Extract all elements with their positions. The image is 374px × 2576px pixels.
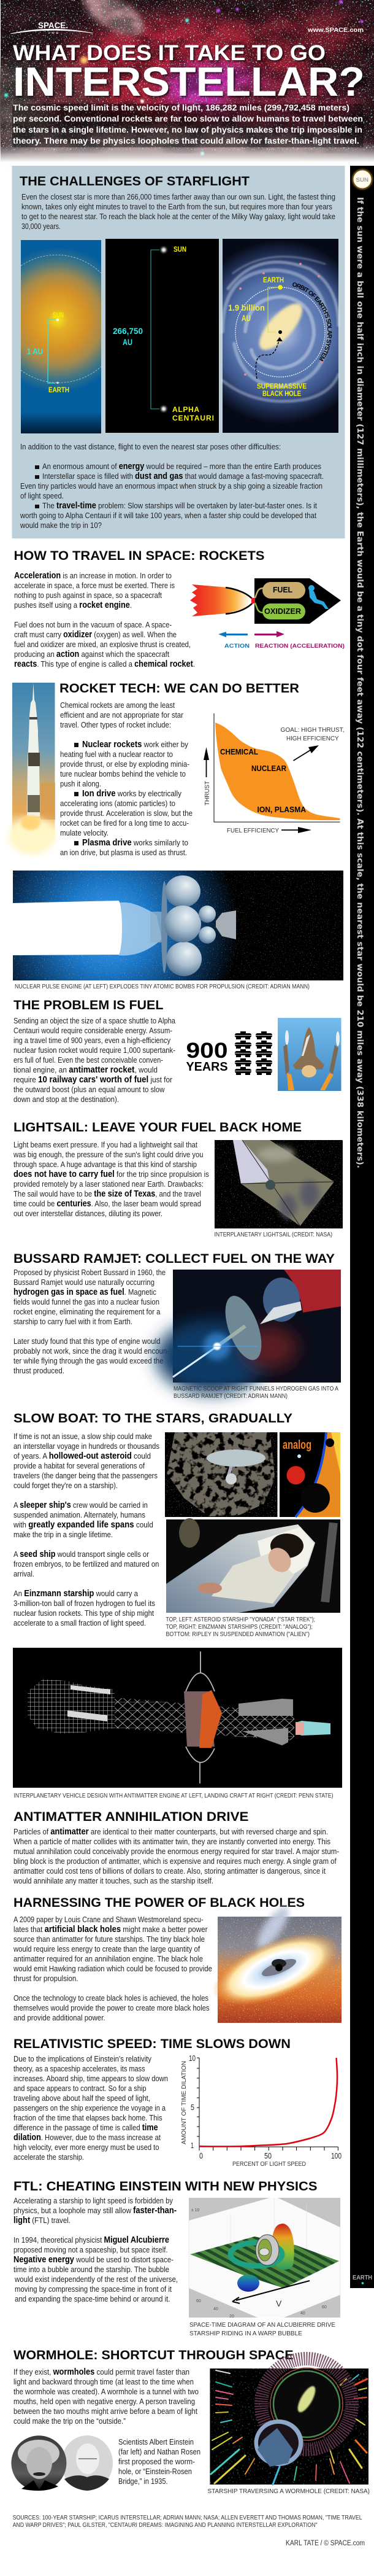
chart: thrust vs fuel efficiency: CHEMICAL <box>220 747 258 756</box>
text: slow boat: provide a habitat for several generations of <box>13 1461 145 1470</box>
website url: www.SPACE.com <box>307 26 364 34</box>
text: other difficulties: worth going to Alpha Centauri if it will take 100 years, when a faster ship could be developed that <box>20 511 316 520</box>
diagram: alcubierre warp bubble: x 10 <box>191 2208 199 2213</box>
text: slow boat: nuclear fusion rockets. This type of ship might <box>13 1608 154 1618</box>
text: acceleration: accelerate in space, a force must be exerted. There is <box>14 581 175 590</box>
diagram: sun to alpha centauri 266,750 AU: ALPHA <box>172 405 199 414</box>
diagram: milky way galaxy <box>221 239 340 433</box>
text: other difficulties: In addition to the vast distance, flight to even the nearest star poses other difficulties: <box>20 442 281 451</box>
text: other difficulties: of light speed. <box>20 491 64 500</box>
text: rocket types: heating fuel with a nuclear reactor to <box>60 750 173 759</box>
chart: time dilation: 10 <box>189 2054 196 2063</box>
text: slow boat: A seed ship would transport single cells or <box>13 1550 150 1559</box>
text: relativistic speed: fraction of the time that elapses back home. This <box>13 2113 162 2122</box>
label: earth: EARTH <box>353 2275 372 2281</box>
diagram: milky way galaxy: AU <box>242 313 251 323</box>
text: bussard ramjet: hydrogen gas in space as fuel. Magnetic <box>13 1287 156 1297</box>
chart: thrust vs fuel efficiency: THRUST <box>204 781 211 805</box>
caption: slow boat images: TOP, LEFT: ASTEROID STARSHIP "YONADA" ("STAR TREK"); <box>166 1616 315 1623</box>
text: lightsail: was big enough, the pressure of the sun's light could drive you <box>13 1150 203 1159</box>
text: antimatter: Particles of antimatter are identical to their matter counterparts, but with reversed charge and spin. <box>13 1827 328 1837</box>
photo: interplanetary antimatter vehicle <box>13 1648 342 1788</box>
text: einstein and rosen: Scientists Albert Einstein <box>118 2437 194 2446</box>
text: slow boat: make the trip in a single lifetime. <box>13 1530 113 1539</box>
text: relativistic speed: and space appears to contract. So for a ship <box>13 2084 146 2093</box>
text: ftl: Accelerating a starship to light speed is forbidden by <box>13 2196 173 2205</box>
text: relativistic speed: Due to the implications of Einstein's relativity <box>13 2054 151 2063</box>
diagram: sun to alpha centauri 266,750 AU: SUN <box>174 245 186 254</box>
text: problem is fuel: tional engine, an antimatter rocket, would <box>13 1065 158 1075</box>
text: other difficulties: Interstellar space is filled with dust and gas that would damage a fast-moving spacecraft. <box>42 471 324 481</box>
text: slow boat: An Einzmann starship would carry a <box>13 1589 139 1599</box>
sidebar: scale model of the sun to earth <box>350 166 374 2288</box>
text: problem is fuel: ing a travel time of 900 years, even a high-efficiency <box>13 1036 170 1045</box>
text: rocket types: accelerating ions (atomic particles) to <box>60 799 175 808</box>
chart: time dilation: AMOUNT OF TIME DILATION <box>181 2061 188 2144</box>
text: relativistic speed: theory, as a spaceship accelerates, its mass <box>13 2064 145 2073</box>
text: black holes: would require less energy to create than the large quantity of <box>13 1944 200 1953</box>
chart: time dilation: 0 <box>199 2151 203 2160</box>
text: problem is fuel: nuclear fusion rocket would require 1,000 supertank- <box>13 1046 175 1055</box>
text: lightsail: provided remotely by a laser stationed near Earth. Drawbacks: <box>13 1179 204 1189</box>
heading: bussard ramjet: BUSSARD RAMJET: COLLECT FUEL ON THE WAY <box>13 1252 335 1266</box>
caption: warp bubble <box>189 2322 335 2337</box>
text: bussard ramjet: fields would funnel the gas into a nuclear fusion <box>13 1297 159 1306</box>
text: problem is fuel: down and stop at the destination). <box>13 1095 119 1104</box>
text: rocket types: provide thrust, or else by exploding minia- <box>60 759 189 769</box>
text: distance: to get to the nearest star. To reach the black hole at the center of the Milky Way galaxy, light would take <box>21 212 335 221</box>
credit: KARL TATE / © SPACE.com <box>286 2540 365 2547</box>
arrow: action: ACTION <box>224 643 250 650</box>
text: relativistic speed: traveling above about half the speed of light, <box>13 2093 150 2103</box>
text: slow boat: travelers (the danger being that the passengers <box>13 1471 158 1480</box>
caption: bussard ramjet: MAGNETIC SCOOP AT RIGHT FUNNELS HYDROGEN GAS INTO A <box>174 1386 338 1392</box>
chart: thrust vs fuel efficiency <box>204 713 345 834</box>
text: bussard ramjet: thrust produced. <box>13 1366 64 1375</box>
fuel tank: FUEL <box>273 585 292 594</box>
caption: slow boat images: TOP, RIGHT: EINZMANN STARSHIPS (CREDIT: "ANALOG"); <box>166 1624 313 1631</box>
text: rocket types: Nuclear rockets work either by <box>82 740 188 750</box>
diagram: milky way galaxy: BLACK HOLE <box>262 389 301 398</box>
caption: slow boat images <box>166 1616 315 1638</box>
photo: interplanetary lightsail <box>215 1140 343 1228</box>
text: bussard ramjet: ter while flying through the gas would exceed the <box>13 1356 163 1365</box>
caption: slow boat images: BOTTOM: RIPLEY IN SUSPENDED ANIMATION ("ALIEN") <box>166 1631 310 1638</box>
text: lightsail: does not have to carry fuel for the trip since propulsion is <box>13 1170 209 1179</box>
text: problem is fuel <box>13 1016 176 1104</box>
text: other difficulties: would make the trip in 10? <box>20 521 102 530</box>
flame <box>190 584 253 616</box>
text: rocket types: efficient and are not appropriate for star <box>60 710 184 720</box>
diagram: milky way galaxy: EARTH <box>263 276 284 284</box>
diagram: alcubierre warp bubble: 60 <box>322 2305 327 2310</box>
text: relativistic speed: high velocity, ever more energy must be used to <box>13 2143 159 2152</box>
text: acceleration: producing an action against which the spacecraft <box>14 650 169 659</box>
text: einstein and rosen: (far left) and Nathan Rosen <box>118 2447 200 2456</box>
text: rocket types: Plasma drive works similarly to <box>82 838 188 848</box>
diagram: rocket with fuel and oxidizer <box>190 578 341 624</box>
label: earth <box>353 2275 372 2284</box>
chart: time dilation: 50 <box>264 2151 272 2160</box>
caption: lightsail: INTERPLANETARY LIGHTSAIL (CREDIT: NASA) <box>215 1232 332 1238</box>
text: wormhole: could make the trip on the “outside.” <box>13 2416 126 2426</box>
caption: warp bubble: SPACE-TIME DIAGRAM OF AN ALCUBIERRE DRIVE <box>189 2322 335 2329</box>
chart: time dilation: 5 <box>191 2103 194 2112</box>
portrait: albert einstein <box>11 2435 66 2491</box>
text: ftl <box>13 2196 178 2303</box>
text: acceleration: craft must carry oxidizer (oxygen) as well. When the <box>14 630 177 640</box>
oxidizer tank <box>262 603 305 619</box>
text: problem is fuel: Centauri would require considerable energy. Assum- <box>13 1026 172 1035</box>
text: wormhole: between the two mouths might arrive before a beam of light <box>13 2407 197 2416</box>
icons: railway tank cars <box>235 1031 272 1075</box>
chart: time dilation: 100 <box>331 2151 342 2160</box>
text: relativistic speed <box>13 2054 168 2162</box>
text: other difficulties <box>20 442 324 530</box>
text: black holes: lates that artificial black holes might make a better power <box>13 1925 208 1934</box>
text: relativistic speed: passengers on the ship experience the voyage in a <box>13 2103 166 2112</box>
chart: thrust vs fuel efficiency: FUEL EFFICIENCY <box>227 828 279 834</box>
text: lightsail: time could be centuries. Also, the laser beam would spread <box>13 1199 201 1209</box>
logo: SPACE.com: SPACE. <box>38 20 68 30</box>
chart: time dilation: PERCENT OF LIGHT SPEED <box>232 2161 306 2168</box>
text: ftl: proposed moving not a spaceship, but space itself. <box>13 2245 168 2254</box>
diagram: sun and earth 1 AU: SUN <box>53 311 64 319</box>
text: slow boat: arrival. <box>13 1569 34 1578</box>
diagram: sun and earth 1 AU: EARTH <box>48 386 69 394</box>
intro text block: the stars in a single lifetime. However, no law of physics makes the trip impossible in <box>13 125 362 134</box>
heading: antimatter: ANTIMATTER ANNIHILATION DRIVE <box>13 1810 249 1824</box>
arrow: reaction: REACTION (ACCELERATION) <box>255 643 345 650</box>
text: rocket types: mulate velocity. <box>60 828 109 837</box>
text: bussard ramjet: rocket engine, eliminating the requirement for a <box>13 1307 161 1316</box>
icon: seated astronaut <box>308 585 329 609</box>
text: relativistic speed: dilation. However, due to the mass increase at <box>13 2133 161 2143</box>
text: relativistic speed: difference in the passage of time is called time <box>13 2123 158 2133</box>
text: black holes <box>13 1915 212 2022</box>
text: ftl: would exist independently of the rest of the universe, <box>14 2275 178 2284</box>
text: bussard ramjet: Bussard Ramjet would use naturally occurring <box>13 1278 155 1287</box>
text: antimatter: mutual annihilation could conceivably provide the enormous energy required for star travel. A major stum- <box>13 1847 339 1856</box>
header: nebula background <box>0 0 374 166</box>
photo: space shuttle <box>278 1018 341 1091</box>
photo: asteroid starship <box>165 1432 277 1517</box>
heading: challenges: THE CHALLENGES OF STARFLIGHT <box>20 174 250 188</box>
text: lightsail <box>13 1140 209 1218</box>
text: ftl: In 1994, theoretical physicist Miguel Alcubierre <box>13 2235 169 2245</box>
chart: time dilation: 1 <box>191 2141 194 2150</box>
caption: antimatter vehicle: INTERPLANETARY VEHICLE DESIGN WITH ANTIMATTER ENGINE AT LEFT, LANDING CRAFT AT RIGHT (CREDIT: PENN STATE) <box>13 1793 334 1799</box>
photo: nuclear pulse engine <box>13 871 343 980</box>
diagram: alcubierre warp bubble: 40 <box>213 2307 218 2311</box>
diagram: alcubierre warp bubble: 20 <box>229 2314 234 2319</box>
text: bussard ramjet: Proposed by physicist Robert Bussard in 1960, the <box>13 1268 166 1277</box>
text: black holes: would emit Hawking radiation which could be focused to provide <box>13 1964 212 1973</box>
text: slow boat: suspended animation. Alternately, humans <box>13 1510 145 1519</box>
text: antimatter: antimatter could cost tens of billions of dollars to create. Also, storing antimatter is dangerous, since it <box>13 1866 326 1876</box>
text: black holes: Once the technology to create black holes is achieved, the holes <box>13 1993 208 2003</box>
sources <box>13 2515 362 2529</box>
heading: wormhole: WORMHOLE: SHORTCUT THROUGH SPACE <box>13 2348 294 2362</box>
text: rocket types: ture nuclear bombs behind the vehicle to <box>60 769 186 778</box>
text: wormhole: If they exist, wormholes could permit travel faster than <box>13 2367 189 2377</box>
text: rocket types: rocket can be fired for a long time to accu- <box>60 818 189 828</box>
intro text block: theory. There may be physics loopholes that could allow for faster-than-light travel. <box>13 136 359 145</box>
text: slow boat: an interstellar voyage in hundreds or thousands <box>13 1441 159 1451</box>
text: ftl: and expanding the space-time behind or around it. <box>15 2294 170 2303</box>
diagram: sun to alpha centauri 266,750 AU <box>105 239 219 433</box>
stat: 900 years <box>186 1039 228 1074</box>
diagram: milky way galaxy: 1.9 billion <box>228 303 265 312</box>
text: rocket types: an ion drive, but plasma is used as thrust. <box>60 848 187 857</box>
text: rocket types: travel. Other types of rocket include: <box>60 720 171 729</box>
text: ftl: physics, but a loophole may still allow faster-than- <box>13 2206 177 2216</box>
text: lightsail: The sail would have to be the size of Texas, and the travel <box>13 1189 201 1199</box>
text: wormhole: light and backward through time (at least to the time when <box>13 2377 194 2386</box>
fuel tank <box>262 582 305 599</box>
text: ftl: light (FTL) travel. <box>13 2216 71 2225</box>
text: bussard ramjet: probably not work, since the drag it would encoun- <box>13 1346 169 1356</box>
text: antimatter: would annihilate any matter it touches, such as the starship itself. <box>13 1876 213 1885</box>
text: antimatter: When a particle of matter collides with its antimatter twin, they are instantly converted into energy. This <box>13 1837 330 1846</box>
text: problem is fuel: ers full of fuel. Even the best conceivable conven- <box>13 1055 163 1065</box>
portrait: nathan rosen <box>61 2435 113 2491</box>
heading: slow boat: SLOW BOAT: TO THE STARS, GRADUALLY <box>13 1411 292 1426</box>
text: lightsail: through space. A huge advantage is that this kind of starship <box>13 1160 197 1169</box>
text: ftl: time into a bubble around the starship. The bubble <box>13 2265 169 2274</box>
diagram: sun and earth 1 AU: 1 AU <box>27 346 43 356</box>
text: antimatter: bling block is the production of antimatter, which is expensive and requires much energy. A single gram of <box>13 1856 337 1866</box>
sources: AND WARP DRIVES"; PAUL GILSTER, "CENTAURI DREAMS: IMAGINING AND PLANNING INTERSTELLAR EXPLORATION" <box>13 2522 318 2529</box>
text: distance: 30,000 years. <box>21 222 61 231</box>
text: other difficulties: An enormous amount of energy would be required – more than the entire Earth produces <box>42 462 321 471</box>
diagram: alcubierre warp bubble: 40 <box>300 2311 305 2316</box>
text: black holes: thrust for propulsion. <box>13 1974 78 1983</box>
text: einstein and rosen: Bridge,” in 1935. <box>118 2477 168 2486</box>
stat: 900 years: 900 <box>186 1039 228 1063</box>
text: wormhole: mouths, held open with negative energy. A person traveling <box>13 2397 195 2406</box>
caption: nuclear pulse: NUCLEAR PULSE ENGINE (AT LEFT) EXPLODES TINY ATOMIC BOMBS FOR PROPULSION (CREDIT: ADRIAN MANN) <box>15 983 310 990</box>
text: black holes: source than antimatter for future starships. The tiny black hole <box>13 1934 205 1944</box>
text: rocket types <box>60 700 193 857</box>
heading: black holes: HARNESSING THE POWER OF BLACK HOLES <box>13 1896 305 1910</box>
chart: thrust vs fuel efficiency: HIGH EFFICIENCY <box>286 735 339 742</box>
text: antimatter <box>13 1827 339 1885</box>
text: acceleration: nothing to push against in space, so a spacecraft <box>14 591 162 600</box>
text: wormhole <box>13 2367 199 2426</box>
caption: bussard ramjet <box>174 1386 338 1400</box>
diagram: milky way galaxy: ORBIT OF EARTH'S SOLAR SYSTEM <box>292 282 332 362</box>
text: rocket types: push it along. <box>60 779 101 788</box>
vertical scale text: If the sun were a ball one half inch in diameter (127 millimeters), the Earth would be a tiny dot four feet away (122 centimeters). At this scale, the nearest star would be 210 miles away (338 kilometers). <box>355 197 365 1168</box>
heading: relativistic speed: RELATIVISTIC SPEED: TIME SLOWS DOWN <box>13 2037 291 2051</box>
text: einstein and rosen <box>118 2437 200 2486</box>
text: distance: known, takes only eight minutes to travel to the Earth from the sun, but requires more than four years <box>21 202 332 211</box>
text: slow boat: If time is not an issue, a slow ship could make <box>13 1432 152 1441</box>
title <box>13 41 365 105</box>
chart: thrust vs fuel efficiency: ION, PLASMA <box>258 805 307 814</box>
photo: bussard ramjet <box>156 1270 341 1394</box>
diagram: sun and earth 1 AU <box>21 240 101 433</box>
diagram: milky way galaxy: SUPERMASSIVE <box>257 382 307 390</box>
photo: black hole <box>203 1903 349 2023</box>
text: rocket types: Ion drive works by electrically <box>82 789 181 799</box>
chart: thrust vs fuel efficiency: GOAL: HIGH THRUST, <box>281 727 345 734</box>
logo: SPACE.com <box>10 20 93 34</box>
text: acceleration: Fuel does not burn in the vacuum of space. A space- <box>14 620 172 629</box>
text: problem is fuel: the outward boost (plus an equal amount to slow <box>13 1085 165 1094</box>
diagram: alcubierre warp bubble: V <box>276 2299 282 2308</box>
text: slow boat: with greatly expanded life spans could <box>13 1520 153 1530</box>
text: black holes: A 2009 paper by Louis Crane and Shawn Westmoreland specu- <box>13 1915 204 1924</box>
heading: ftl: FTL: CHEATING EINSTEIN WITH NEW PHYSICS <box>13 2179 318 2194</box>
title: WHAT DOES IT TAKE TO GO <box>13 41 326 65</box>
photo: saturn V rocket <box>9 683 55 855</box>
text: rocket types: Chemical rockets are among the least <box>60 700 175 710</box>
heading: problem is fuel: THE PROBLEM IS FUEL <box>13 998 164 1012</box>
text: ftl: moving by compressing the space-time in front of it <box>15 2284 172 2294</box>
intro text block <box>12 103 364 147</box>
text: lightsail: out over interstellar distances, diluting its power. <box>13 1209 162 1218</box>
heading: rockets: HOW TO TRAVEL IN SPACE: ROCKETS <box>13 549 265 563</box>
chart: time dilation <box>181 2054 342 2168</box>
text: other difficulties: The travel-time problem: Slow starships will be overtaken by later-but-faster ones. Is it <box>42 501 317 511</box>
diagram: sun to alpha centauri 266,750 AU: 266,750 <box>113 326 143 336</box>
logo: SPACE.com: .COM <box>45 31 59 34</box>
text: slow boat: frozen embryos, to be fertilized and matured on <box>13 1559 159 1569</box>
heading: lightsail: LIGHTSAIL: LEAVE YOUR FUEL BACK HOME <box>13 1120 302 1135</box>
panel: challenges of starflight <box>12 166 345 538</box>
text: black holes: themselves would provide the power to create more black holes <box>13 2003 210 2012</box>
text: slow boat: could forget they're on a starship). <box>13 1481 118 1490</box>
text: bussard ramjet <box>13 1268 169 1375</box>
text: black holes: antimatter required for an annihilation engine. The black hole <box>13 1954 203 1963</box>
arrow: reaction <box>254 631 345 650</box>
heading: rocket tech: ROCKET TECH: WE CAN DO BETTER <box>59 681 299 696</box>
caption: warp bubble: STARSHIP RIDING IN A WARP BUBBLE <box>189 2330 302 2337</box>
text: ftl: Negative energy would be used to distort space- <box>13 2255 174 2265</box>
caption: wormhole: STARSHIP TRAVERSING A WORMHOLE (CREDIT: NASA) <box>207 2488 370 2495</box>
photo: analog magazine cover: analog <box>283 1438 311 1452</box>
diagram: sun to alpha centauri 266,750 AU: CENTAURI <box>172 414 214 422</box>
stat: 900 years: YEARS <box>186 1060 228 1074</box>
text: other difficulties: Even tiny particles would have an enormous impact when struck by a ship going a sizeable fraction <box>20 481 322 491</box>
text: acceleration <box>14 571 195 669</box>
text: relativistic speed: accelerate the starship. <box>13 2152 84 2162</box>
text: acceleration: fuel and oxidizer are mixed, an explosive thrust is created, <box>14 640 191 649</box>
text: rocket types: provide thrust. Acceleration is slow, but the <box>60 809 193 818</box>
icon: sun <box>352 169 373 190</box>
text: acceleration: pushes itself using a rocket engine. <box>14 600 132 610</box>
text: slow boat: 3-million-ton ball of frozen hydrogen to fuel its <box>13 1599 155 1608</box>
text: relativistic speed: increases. Aboard ship, time appears to slow down <box>13 2074 168 2083</box>
diagram: alcubierre warp bubble: 60 <box>196 2299 201 2303</box>
diagram: sun to alpha centauri 266,750 AU: AU <box>123 337 132 347</box>
text: bussard ramjet: starship to carry fuel with it from Earth. <box>13 1317 132 1326</box>
text: black holes: and provide additional power. <box>13 2013 105 2022</box>
text: lightsail: Light beams exert pressure. If you had a lightweight sail that <box>13 1140 197 1149</box>
text: acceleration: Acceleration is an increase in motion. In order to <box>14 571 172 581</box>
photo: starship traversing wormhole <box>210 2359 368 2485</box>
text: slow boat: A sleeper ship's crew would be carried in <box>13 1500 148 1510</box>
text: einstein and rosen: hole, or “Einstein-Rosen <box>118 2467 192 2476</box>
icon: sun: SUN <box>356 177 368 184</box>
title: INTERSTELLAR? <box>13 59 365 105</box>
text: bussard ramjet: Later study found that this type of engine would <box>13 1336 161 1346</box>
intro text block: per second. Conventional rockets are far too slow to allow humans to travel between <box>13 114 363 123</box>
arrow: action <box>218 632 250 650</box>
photo: ripley in suspended animation <box>166 1518 340 1613</box>
text: slow boat: accelerate to a small fraction of light speed. <box>13 1618 146 1627</box>
text: distance <box>21 192 335 231</box>
chart: thrust vs fuel efficiency: NUCLEAR <box>251 764 287 773</box>
oxidizer tank: OXIDIZER <box>264 607 302 616</box>
rocket body <box>254 578 341 624</box>
photo: analog magazine cover <box>280 1432 340 1517</box>
text: problem is fuel: require 10 railway cars' worth of fuel just for <box>13 1075 173 1085</box>
caption: bussard ramjet: BUSSARD RAMJET (CREDIT: ADRIAN MANN) <box>174 1393 288 1400</box>
text: problem is fuel: Sending an object the size of a space shuttle to Alpha <box>13 1016 176 1025</box>
text: acceleration: reacts. This type of engine is called a chemical rocket. <box>14 659 195 669</box>
text: slow boat <box>13 1432 159 1627</box>
diagram: alcubierre warp bubble <box>189 2198 340 2319</box>
text: wormhole: the wormhole was created). A wormhole is a tunnel with two <box>13 2387 199 2396</box>
nozzle <box>226 588 253 614</box>
text: einstein and rosen: first proposed the worm- <box>118 2457 195 2466</box>
intro text block: The cosmic speed limit is the velocity of light, 186,282 miles (299,792,458 meters) <box>13 103 349 112</box>
text: slow boat: of years. A hollowed-out asteroid could <box>13 1451 151 1461</box>
